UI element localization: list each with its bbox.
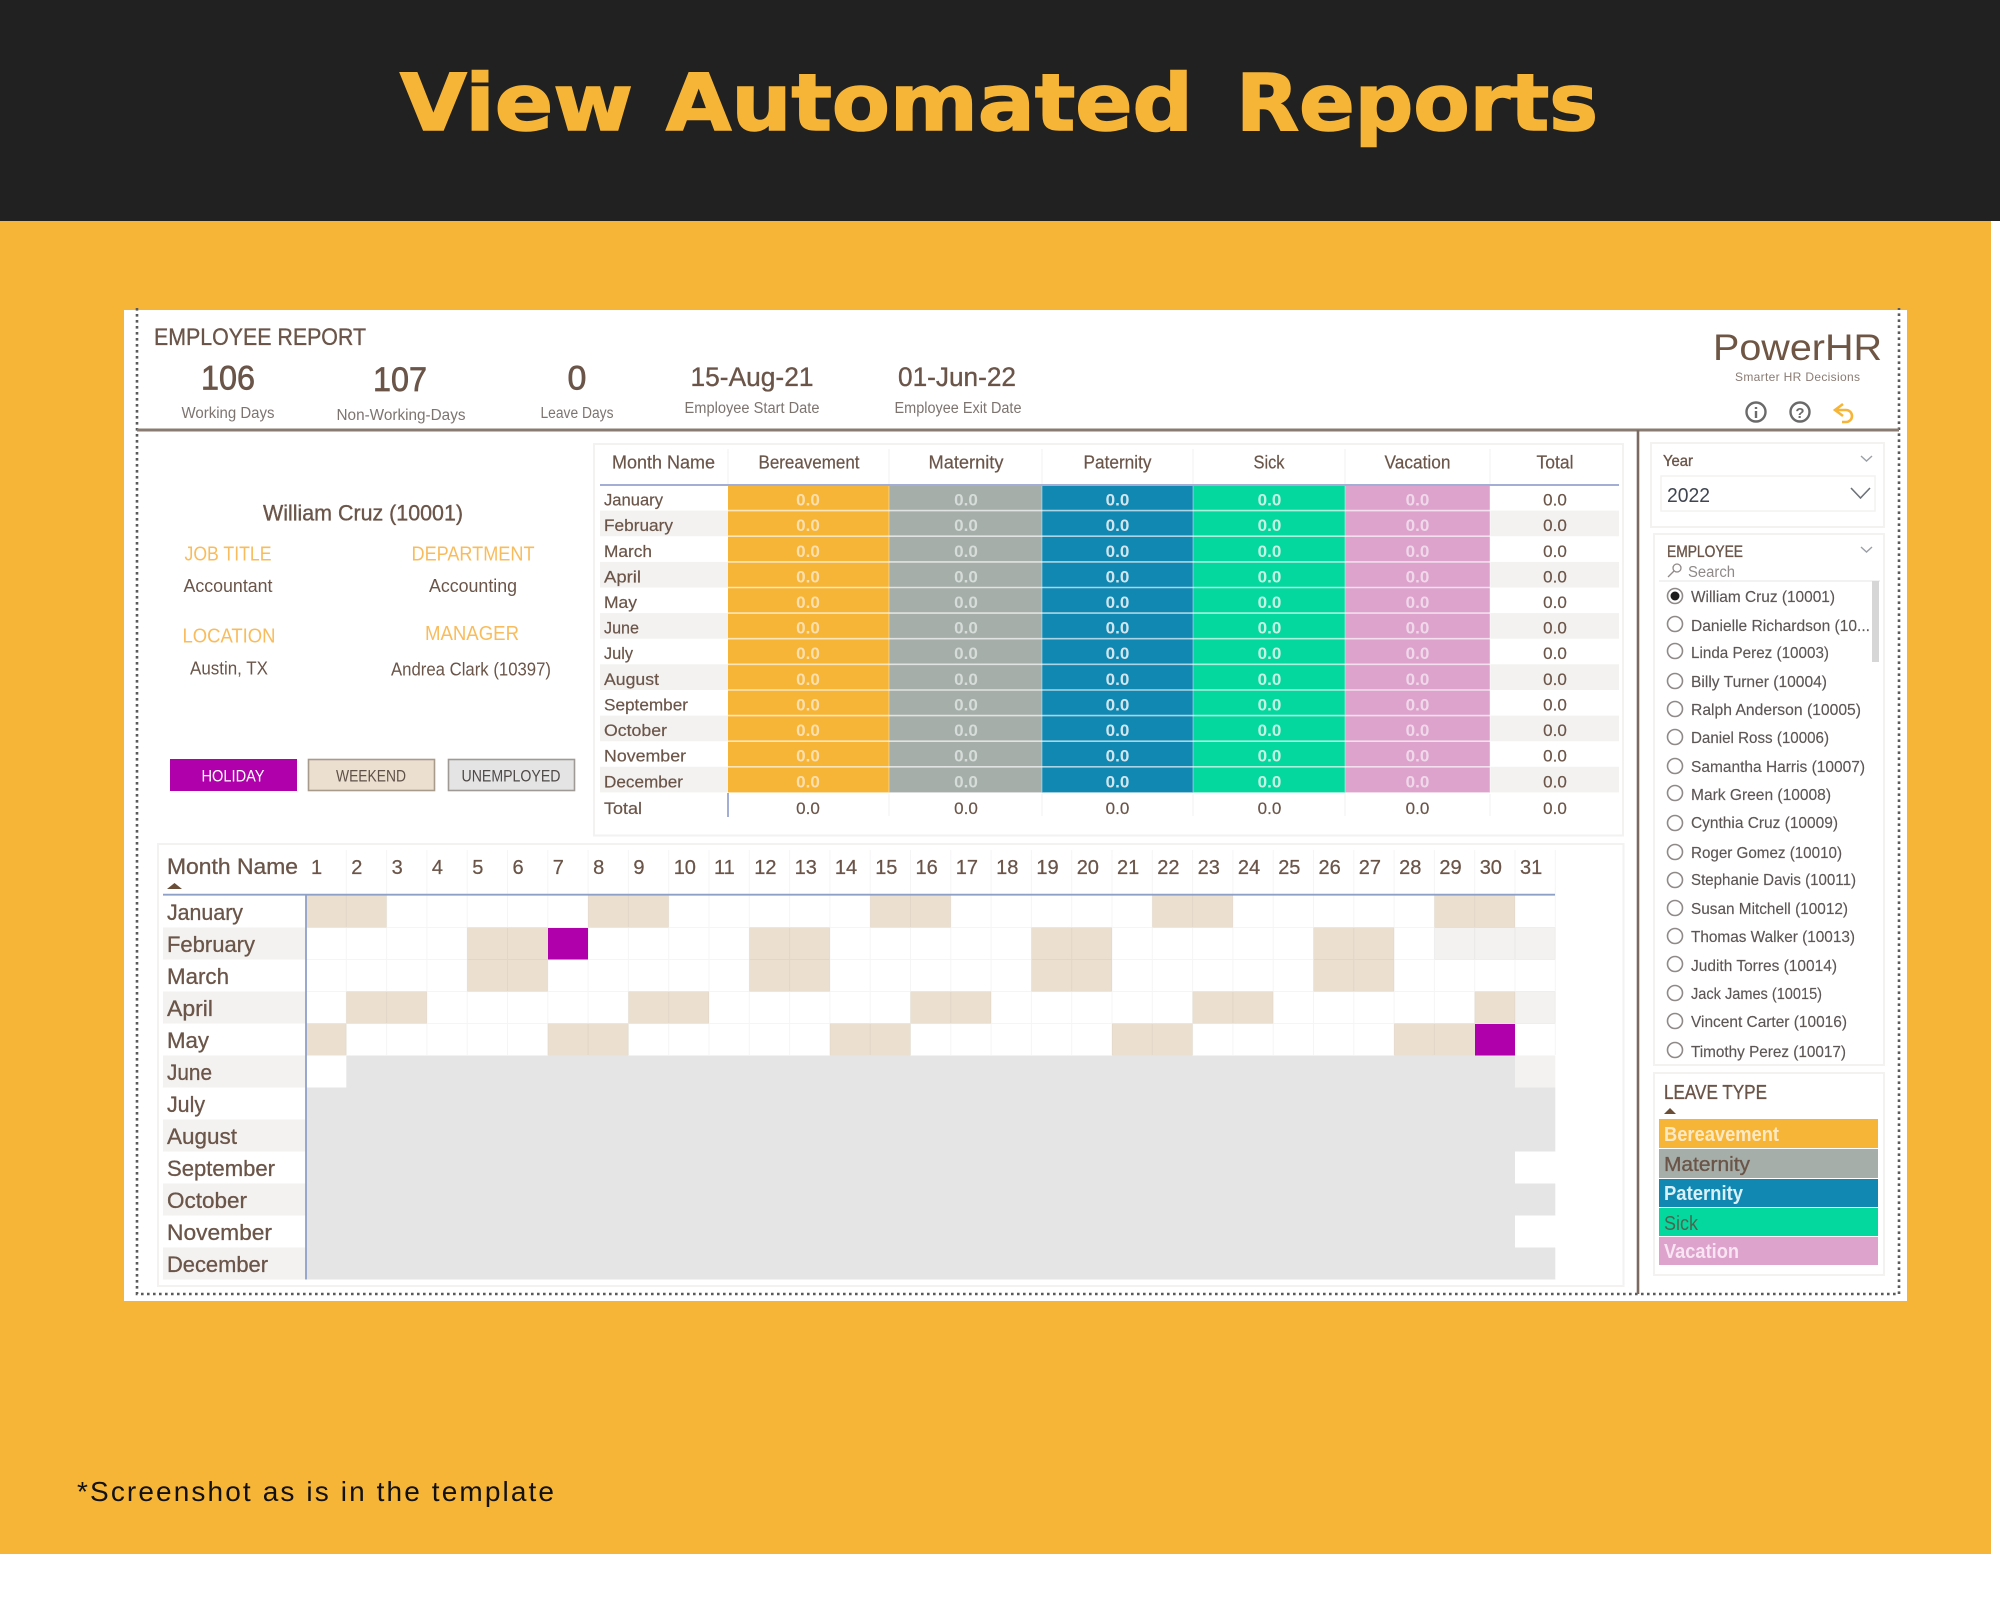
bereavement column values: 0.0 [796, 619, 820, 638]
legend button: holiday [170, 759, 297, 791]
paternity column values: 0.0 [1106, 644, 1129, 663]
scrollbar [1872, 581, 1879, 662]
paternity column values: 0.0 [1106, 772, 1129, 792]
bereavement column values: 0.0 [796, 799, 820, 818]
calendar day numbers: 3 [392, 857, 403, 879]
calendar day numbers: 2 [351, 857, 362, 879]
calendar day numbers: 16 [916, 857, 938, 879]
icon: help: ? [1795, 405, 1805, 422]
panel: employee slicer [1654, 534, 1884, 1065]
bereavement column values: 0.0 [796, 542, 820, 561]
calendar month labels: April [167, 996, 213, 1021]
icon: help [1790, 402, 1810, 422]
maternity column values: 0.0 [954, 644, 978, 663]
title: View [400, 59, 633, 149]
bereavement column values: 0.0 [796, 772, 820, 792]
total column values: 0.0 [1543, 695, 1567, 714]
calendar month labels: November [167, 1220, 272, 1245]
calendar day numbers: 26 [1318, 857, 1341, 879]
total column values: 0.0 [1543, 799, 1567, 818]
maternity column values: 0.0 [954, 491, 978, 510]
sick column values: 0.0 [1258, 644, 1281, 663]
total column values: 0.0 [1543, 567, 1567, 586]
employee name: William Cruz (10001) [263, 500, 463, 526]
maternity column values: 0.0 [954, 619, 978, 638]
paternity column values: 0.0 [1106, 567, 1129, 586]
table header: Maternity [928, 453, 1004, 473]
employee list: Stephanie Davis (10011) [1691, 872, 1856, 889]
vacation column values: 0.0 [1406, 799, 1429, 818]
calendar weekend cells [306, 896, 1515, 1056]
calendar day numbers: 15 [875, 857, 897, 879]
legend heading: LEAVE TYPE [1664, 1082, 1767, 1104]
table header: Bereavement [758, 453, 860, 473]
KPI: working days: Working Days [182, 405, 275, 422]
table header: Vacation [1384, 453, 1450, 473]
calendar header: month name with sort arrow: Month Name [167, 854, 298, 879]
KPI: employee start date [684, 362, 820, 417]
employee details [182, 500, 551, 680]
bereavement column values: 0.0 [796, 567, 820, 586]
bereavement column values: 0.0 [796, 516, 820, 535]
logo: PowerHR [1713, 327, 1882, 384]
paternity column values: 0.0 [1106, 721, 1129, 740]
table month labels: August [604, 670, 659, 689]
title: Automated [666, 59, 1193, 149]
manager [391, 623, 551, 680]
vacation column values: 0.0 [1406, 542, 1429, 561]
bereavement column values: 0.0 [796, 491, 820, 510]
table month labels: April [604, 567, 641, 586]
calendar day numbers: 22 [1157, 857, 1180, 879]
table month labels: March [604, 542, 652, 561]
bereavement column values: 0.0 [796, 695, 820, 714]
panel: year slicer: Year [1663, 453, 1694, 470]
calendar month labels: July [167, 1092, 205, 1117]
legend item: sick [1659, 1208, 1878, 1236]
calendar day numbers: 31 [1520, 857, 1542, 879]
legend item: sick: Sick [1664, 1213, 1699, 1235]
footnote: *Screenshot as is in the template [77, 1476, 554, 1507]
total column values: 0.0 [1543, 644, 1567, 663]
chart: daily attendance calendar grid [158, 844, 1624, 1286]
maternity column values: 0.0 [954, 695, 978, 714]
bereavement column values: 0.0 [796, 670, 820, 689]
calendar month labels: March [167, 964, 229, 989]
table month labels: September [604, 695, 688, 714]
calendar day numbers: 14 [835, 857, 857, 879]
KPI: leave days [540, 360, 614, 422]
legend item: bereavement [1659, 1119, 1878, 1148]
vacation column values: 0.0 [1406, 619, 1429, 638]
sick column values: 0.0 [1258, 670, 1281, 689]
location [182, 626, 276, 678]
panel: employee slicer: EMPLOYEE [1667, 543, 1743, 561]
bereavement column values: 0.0 [796, 721, 820, 740]
total column values [1543, 491, 1567, 818]
legend item: paternity [1659, 1179, 1878, 1207]
paternity column values: 0.0 [1106, 695, 1129, 714]
maternity column values: 0.0 [954, 721, 978, 740]
manager: Andrea Clark (10397) [391, 660, 551, 680]
calendar month labels: June [167, 1060, 212, 1085]
legend item: vacation: Vacation [1664, 1241, 1739, 1263]
KPI: non-working days: 107 [373, 361, 427, 399]
vacation column values: 0.0 [1406, 721, 1429, 740]
legend button: holiday: HOLIDAY [202, 766, 264, 786]
KPI: employee exit date: Employee Exit Date [894, 400, 1022, 417]
table month labels: November [604, 747, 686, 766]
employee list: Cynthia Cruz (10009) [1691, 815, 1838, 832]
total column values: 0.0 [1543, 772, 1567, 792]
calendar day numbers: 13 [795, 857, 817, 879]
employee list: Thomas Walker (10013) [1691, 929, 1855, 946]
KPI: non-working days: Non-Working-Days [336, 407, 466, 424]
calendar day numbers: 9 [633, 857, 645, 879]
legend button: weekend [308, 760, 434, 790]
KPI: employee exit date: 01-Jun-22 [898, 362, 1016, 392]
employee list: Vincent Carter (10016) [1691, 1014, 1847, 1031]
sick column values: 0.0 [1258, 516, 1281, 535]
legend item: vacation [1659, 1237, 1878, 1265]
vacation column values: 0.0 [1406, 695, 1429, 714]
paternity column values [1106, 491, 1129, 818]
sick column values: 0.0 [1258, 721, 1281, 740]
calendar day numbers: 19 [1036, 857, 1059, 879]
employee list [1668, 588, 1870, 1061]
legend button: unemployed [448, 760, 574, 790]
table month labels: December [604, 772, 683, 792]
legend item: maternity: Maternity [1664, 1154, 1750, 1176]
logo: PowerHR: PowerHR [1713, 327, 1882, 368]
vacation column values: 0.0 [1406, 593, 1429, 612]
employee list: Danielle Richardson (10... [1691, 618, 1870, 635]
total column values: 0.0 [1543, 516, 1567, 535]
location: LOCATION [182, 626, 276, 648]
calendar day numbers: 23 [1198, 857, 1220, 879]
calendar day numbers: 27 [1359, 857, 1381, 879]
calendar month labels: May [167, 1028, 209, 1053]
panel: leave type legend [1654, 1073, 1884, 1275]
location: Austin, TX [190, 658, 268, 678]
table month labels: Total [604, 799, 642, 818]
maternity column values: 0.0 [954, 747, 978, 766]
paternity column values: 0.0 [1106, 542, 1129, 561]
vacation column values: 0.0 [1406, 567, 1429, 586]
KPI: employee exit date [894, 362, 1022, 417]
calendar day numbers: 25 [1278, 857, 1300, 879]
maternity column values: 0.0 [954, 516, 978, 535]
search box [1668, 564, 1735, 581]
paternity column values: 0.0 [1106, 799, 1129, 818]
calendar day numbers: 5 [472, 857, 483, 879]
table month labels: October [604, 721, 667, 740]
manager: MANAGER [425, 623, 519, 645]
KPI: employee start date: 15-Aug-21 [690, 362, 814, 392]
sick column values: 0.0 [1258, 491, 1281, 510]
panel: employee report dashboard [124, 308, 1907, 1301]
maternity column values [954, 491, 978, 818]
job title: JOB TITLE [184, 544, 272, 566]
employee list: Mark Green (10008) [1691, 787, 1831, 804]
search box: Search [1688, 564, 1735, 581]
bereavement column values [796, 491, 820, 818]
paternity column values: 0.0 [1106, 593, 1129, 612]
table month labels: January [604, 491, 663, 510]
calendar day numbers: 21 [1117, 857, 1139, 879]
table header: Paternity [1084, 453, 1152, 473]
legend button: weekend: WEEKEND [336, 766, 406, 786]
calendar day numbers: 20 [1077, 857, 1099, 879]
KPI: working days [182, 360, 275, 422]
calendar month labels: August [167, 1124, 237, 1149]
table header [612, 453, 1574, 473]
vacation column values: 0.0 [1406, 747, 1429, 766]
employee list: Ralph Anderson (10005) [1691, 702, 1861, 719]
calendar day numbers: 29 [1439, 857, 1462, 879]
calendar day numbers: 6 [512, 857, 524, 879]
maternity column values: 0.0 [954, 593, 978, 612]
title: Reports [1236, 59, 1598, 149]
maternity column values: 0.0 [954, 542, 978, 561]
maternity column values: 0.0 [954, 567, 978, 586]
sick column values [1258, 491, 1281, 818]
job title: Accountant [184, 576, 272, 596]
KPI: working days: 106 [201, 360, 255, 398]
sick column values: 0.0 [1258, 772, 1281, 792]
bereavement column values: 0.0 [796, 747, 820, 766]
calendar month labels: January [167, 900, 243, 925]
legend button: unemployed: UNEMPLOYED [462, 766, 560, 786]
vacation column values: 0.0 [1406, 644, 1429, 663]
KPI: leave days: 0 [568, 360, 586, 398]
KPI: employee start date: Employee Start Date [684, 400, 820, 417]
calendar unemployed cells [306, 1056, 1555, 1280]
calendar day numbers: 8 [593, 857, 604, 879]
paternity column values: 0.0 [1106, 516, 1129, 535]
sick column values: 0.0 [1258, 799, 1281, 818]
legend item: paternity: Paternity [1664, 1183, 1744, 1205]
employee list: Judith Torres (10014) [1691, 958, 1837, 975]
calendar day numbers: 28 [1399, 857, 1421, 879]
holiday cell: February 7 [548, 928, 588, 960]
employee list: Daniel Ross (10006) [1691, 730, 1829, 747]
bereavement column values: 0.0 [796, 593, 820, 612]
calendar day numbers: 17 [956, 857, 978, 879]
paternity column values: 0.0 [1106, 747, 1129, 766]
calendar day numbers: 7 [553, 857, 564, 879]
paternity column values: 0.0 [1106, 491, 1129, 510]
calendar day numbers: 30 [1480, 857, 1502, 879]
vacation column values: 0.0 [1406, 491, 1429, 510]
legend item: maternity [1659, 1149, 1878, 1178]
total column values: 0.0 [1543, 670, 1567, 689]
legend item: bereavement: Bereavement [1664, 1124, 1779, 1146]
department: Accounting [429, 576, 517, 596]
logo: PowerHR: Smarter HR Decisions [1735, 370, 1860, 384]
vacation column values: 0.0 [1406, 516, 1429, 535]
icon: info [1746, 402, 1766, 422]
table header: Sick [1254, 453, 1285, 473]
calendar month labels: October [167, 1188, 247, 1213]
paternity column values: 0.0 [1106, 619, 1129, 638]
total column values: 0.0 [1543, 542, 1567, 561]
calendar row stripes [163, 928, 1555, 1280]
icon: back arrow [1835, 404, 1852, 422]
KPI: leave days: Leave Days [540, 405, 614, 422]
bereavement column values: 0.0 [796, 644, 820, 663]
calendar day numbers: 11 [714, 857, 735, 879]
calendar day numbers: 1 [311, 857, 322, 879]
table header: Month Name [612, 453, 715, 473]
calendar month labels: September [167, 1156, 275, 1181]
job title [184, 544, 272, 596]
total column values: 0.0 [1543, 721, 1567, 740]
calendar month labels: February [167, 932, 255, 957]
calendar day numbers: 4 [432, 857, 443, 879]
employee list: William Cruz (10001) [1691, 589, 1835, 606]
calendar day numbers: 24 [1238, 857, 1260, 879]
table month labels: May [604, 593, 638, 612]
department [412, 544, 534, 596]
sick column values: 0.0 [1258, 567, 1281, 586]
table month labels: February [604, 516, 674, 535]
sick column values: 0.0 [1258, 593, 1281, 612]
dark title banner [0, 0, 2000, 221]
calendar month labels: December [167, 1252, 268, 1277]
maternity column values: 0.0 [954, 772, 978, 792]
calendar month labels [167, 900, 275, 1277]
total column values: 0.0 [1543, 619, 1567, 638]
total column values: 0.0 [1543, 747, 1567, 766]
employee list: Linda Perez (10003) [1691, 645, 1829, 662]
KPI: non-working days [336, 361, 466, 424]
sick column values: 0.0 [1258, 695, 1281, 714]
sick column values: 0.0 [1258, 747, 1281, 766]
holiday cell: May 30 [1475, 1024, 1515, 1056]
calendar day numbers: 18 [996, 857, 1018, 879]
table: leave days by month and type [594, 444, 1623, 836]
calendar header: month name with sort arrow [167, 854, 298, 889]
calendar day numbers: 10 [674, 857, 696, 879]
legend heading [1664, 1082, 1767, 1114]
calendar day numbers: 12 [754, 857, 777, 879]
vacation column values [1406, 491, 1429, 818]
total column values: 0.0 [1543, 593, 1567, 612]
panel: year slicer [1651, 443, 1884, 527]
department: DEPARTMENT [412, 544, 534, 566]
employee list: Roger Gomez (10010) [1691, 845, 1842, 862]
vacation column values: 0.0 [1406, 670, 1429, 689]
employee list: Billy Turner (10004) [1691, 674, 1827, 691]
total column values: 0.0 [1543, 491, 1567, 510]
table header: Total [1536, 453, 1574, 473]
sick column values: 0.0 [1258, 619, 1281, 638]
calendar day numbers [311, 857, 1542, 879]
title [400, 59, 1598, 149]
employee list: Timothy Perez (10017) [1691, 1044, 1846, 1061]
sick column values: 0.0 [1258, 542, 1281, 561]
table month labels: July [604, 644, 633, 663]
employee list: Samantha Harris (10007) [1691, 759, 1865, 776]
table month labels [604, 491, 688, 818]
employee list: Jack James (10015) [1691, 986, 1822, 1003]
employee list: Susan Mitchell (10012) [1691, 901, 1848, 918]
panel: year slicer: 2022 [1667, 485, 1710, 507]
vacation column values: 0.0 [1406, 772, 1429, 792]
table month labels: June [604, 619, 639, 638]
maternity column values: 0.0 [954, 799, 978, 818]
heading: employee report: EMPLOYEE REPORT [154, 324, 366, 351]
maternity column values: 0.0 [954, 670, 978, 689]
paternity column values: 0.0 [1106, 670, 1129, 689]
